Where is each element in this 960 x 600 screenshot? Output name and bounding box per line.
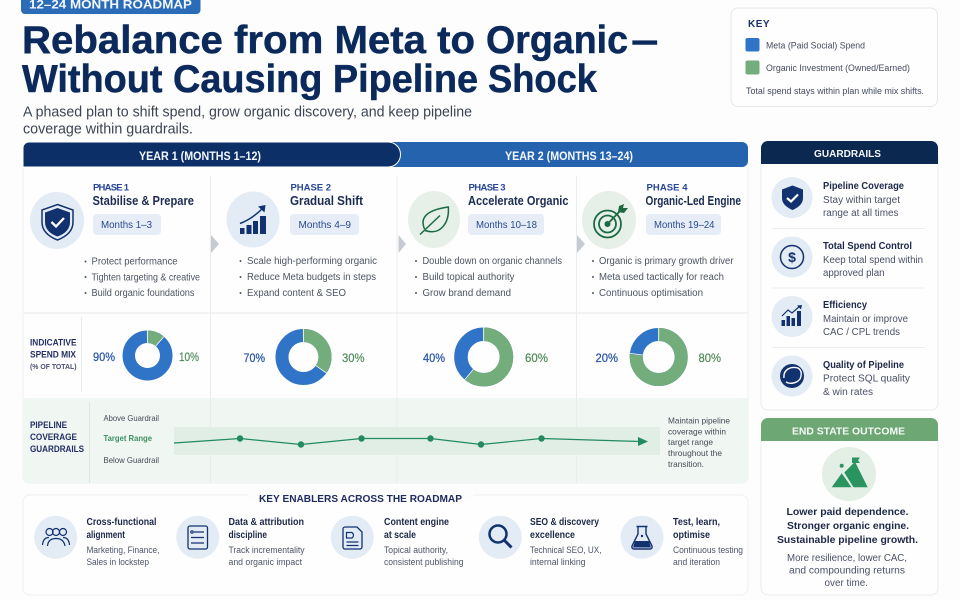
arrow: phase 3 to 4 xyxy=(577,235,585,253)
phase 4 xyxy=(582,182,741,299)
guardrail level labels xyxy=(104,413,159,465)
title: Organic xyxy=(486,19,628,62)
guardrail: pipeline coverage: Pipeline Coverage xyxy=(823,181,904,192)
enabler: seo: excellence xyxy=(530,530,575,541)
icon: leaf xyxy=(408,191,460,248)
pipeline note: Maintain pipeline xyxy=(668,416,730,426)
icon: shield xyxy=(30,192,84,249)
phase 3: Accelerate Organic xyxy=(468,194,569,208)
panel: key: Organic Investment (Owned/Earned) xyxy=(766,63,910,73)
phase 2 xyxy=(226,182,377,299)
key: organic swatch xyxy=(746,60,760,74)
arrow: phase 1 to 2 xyxy=(211,235,219,253)
phase 3 bullets xyxy=(415,256,562,299)
donut chart: phase 2 xyxy=(244,329,365,378)
enabler: test and learn: Continuous testing xyxy=(673,545,743,555)
spend mix label: SPEND MIX xyxy=(30,350,76,360)
guardrail: pipeline coverage: Stay within target xyxy=(823,195,900,206)
phase 2: Gradual Shift xyxy=(290,194,364,208)
enabler: seo xyxy=(479,516,602,567)
phase 2 bullets: Expand content & SEO xyxy=(247,288,346,299)
enabler: data and attribution: Data & attribution xyxy=(228,517,304,528)
spend mix label: INDICATIVE xyxy=(30,338,76,348)
enabler: data and attribution: Track incrementality xyxy=(228,545,305,555)
donut chart: phase 1: 10% xyxy=(179,350,199,364)
donut chart: phase 3: 60% xyxy=(525,351,548,365)
phase 4: Organic-Led Engine xyxy=(646,194,741,208)
key: meta swatch xyxy=(746,38,760,52)
donut chart: phase 4 xyxy=(596,328,721,380)
title: Without Causing Pipeline xyxy=(22,58,478,101)
guardrail: efficiency: CAC / CPL trends xyxy=(823,327,900,338)
panel: end state outcome: Sustainable pipeline growth. xyxy=(777,534,918,546)
enabler: content engine: Content engine xyxy=(384,517,449,528)
pipeline coverage label xyxy=(30,420,84,454)
phase 1 bullets: Tighten targeting & creative xyxy=(92,272,200,284)
guardrail: pipeline coverage: range at all times xyxy=(823,208,898,219)
enabler: seo: SEO & discovery xyxy=(530,517,599,528)
enabler: content engine: at scale xyxy=(384,530,416,541)
line chart: pipeline coverage xyxy=(174,427,660,455)
guardrail level labels: Target Range xyxy=(104,433,152,443)
enabler: data and attribution: discipline xyxy=(228,530,267,541)
phase 3 xyxy=(408,182,569,299)
enabler: test and learn: Test, learn, xyxy=(673,517,720,528)
guardrail: quality of pipeline: & win rates xyxy=(823,387,873,398)
title: Shock xyxy=(488,58,597,101)
phase 1 bullets: Build organic foundations xyxy=(92,288,194,299)
year 2 bar xyxy=(385,142,748,167)
donut chart: phase 1 xyxy=(93,330,199,374)
guardrail: total spend control: Total Spend Control xyxy=(823,241,912,252)
panel: end state outcome: and compounding returns xyxy=(789,566,905,576)
phase 2 bullets: Reduce Meta budgets in steps xyxy=(247,272,376,283)
donut chart: phase 3 xyxy=(423,328,548,380)
phase 3 bullets: Grow brand demand xyxy=(422,288,511,299)
panel: key: Meta (Paid Social) Spend xyxy=(766,40,865,50)
panel: end state outcome: END STATE OUTCOME xyxy=(792,426,905,438)
phase 1: PHASE 1 xyxy=(93,182,130,194)
pipeline note: target range xyxy=(668,437,713,447)
title: — xyxy=(632,19,657,62)
enabler: seo: Technical SEO, UX, xyxy=(530,545,602,555)
panel: end state outcome: over time. xyxy=(824,578,868,589)
guardrail: total spend control: Keep total spend within xyxy=(823,255,923,266)
donut chart: phase 1: 90% xyxy=(93,350,115,364)
panel: roadmap main xyxy=(23,160,748,483)
phase 4: PHASE 4 xyxy=(646,182,688,194)
phase 1 bullets: Protect performance xyxy=(92,257,178,268)
enabler: test and learn: and iteration xyxy=(673,557,720,567)
pipeline coverage label: PIPELINE xyxy=(30,420,67,430)
pipeline coverage label: COVERAGE xyxy=(30,432,77,442)
months pill: Months 19–24 xyxy=(654,220,715,231)
panel: guardrails xyxy=(761,141,938,410)
months pill xyxy=(468,214,544,235)
enabler: seo: internal linking xyxy=(530,557,586,567)
year 1 bar xyxy=(23,142,400,167)
guardrail: quality of pipeline: Quality of Pipeline xyxy=(823,360,904,371)
enabler: content engine xyxy=(331,516,464,567)
months pill: Months 1–3 xyxy=(101,220,152,231)
subtitle: coverage within guardrails. xyxy=(23,120,193,138)
pipeline note xyxy=(668,416,730,469)
panel: end state outcome xyxy=(761,418,938,595)
title: Rebalance from Meta to xyxy=(22,19,475,62)
panel: key: KEY xyxy=(748,19,770,30)
enabler: alignment: Cross-functional xyxy=(86,517,157,528)
enabler: alignment xyxy=(34,516,160,567)
phase 2 bullets: Scale high-performing organic xyxy=(247,256,377,267)
donut chart: phase 4: 80% xyxy=(698,351,721,365)
phase 4 bullets xyxy=(592,256,734,299)
icon: mountain with flag xyxy=(822,447,876,501)
donut chart: phase 4: 20% xyxy=(596,351,618,365)
roadmap badge xyxy=(21,0,200,14)
panel: key: Total spend stays within plan while mix shifts. xyxy=(746,86,924,96)
pipeline note: coverage within xyxy=(668,426,726,436)
guardrail: efficiency: Maintain or improve xyxy=(823,314,908,325)
enabler: data and attribution: and organic impact xyxy=(228,557,302,567)
months pill: Months 10–18 xyxy=(476,220,537,231)
phase 1 xyxy=(30,182,200,299)
subtitle: A phased plan to shift spend, grow organic discovery, and keep pipeline xyxy=(23,104,472,120)
phase 3 bullets: Build topical authority xyxy=(422,272,514,283)
pipeline note: throughout the xyxy=(668,448,722,458)
phase 1: Stabilise & Prepare xyxy=(92,194,194,208)
panel: key xyxy=(731,8,938,106)
year 1 bar: YEAR 1 (MONTHS 1–12) xyxy=(139,151,261,163)
icon: growth chart xyxy=(226,192,280,248)
phase 3: PHASE 3 xyxy=(468,182,506,194)
months pill: Months 4–9 xyxy=(298,220,351,231)
pipeline coverage label: GUARDRAILS xyxy=(30,444,84,454)
enabler: content engine: consistent publishing xyxy=(384,557,464,567)
arrow: phase 2 to 3 xyxy=(398,235,406,253)
panel: key enablers xyxy=(23,490,748,595)
guardrail: pipeline coverage xyxy=(772,177,904,219)
guardrail level labels: Below Guardrail xyxy=(104,455,159,465)
phase 1 bullets xyxy=(84,257,200,299)
panel: guardrails: GUARDRAILS xyxy=(814,148,881,160)
donut chart: phase 3: 40% xyxy=(423,351,445,365)
panel: key enablers: KEY ENABLERS ACROSS THE ROADMAP xyxy=(259,493,462,505)
phase 4 bullets: Meta used tactically for reach xyxy=(599,272,724,283)
months pill xyxy=(93,214,161,235)
enabler: alignment: alignment xyxy=(86,530,126,541)
enabler: alignment: Marketing, Finance, xyxy=(86,545,160,555)
guardrail: total spend control xyxy=(772,236,923,279)
months pill xyxy=(646,214,721,235)
enabler: alignment: Sales in lockstep xyxy=(86,557,149,567)
guardrail: quality of pipeline xyxy=(772,356,910,398)
guardrail level labels: Above Guardrail xyxy=(104,413,159,423)
phase 2 bullets xyxy=(240,256,377,299)
guardrail: total spend control: approved plan xyxy=(823,268,884,279)
enabler: test and learn xyxy=(620,516,743,567)
pipeline row background xyxy=(23,398,748,483)
months pill xyxy=(290,214,359,235)
year 2 bar: YEAR 2 (MONTHS 13–24) xyxy=(505,151,633,163)
panel: end state outcome: Stronger organic engine. xyxy=(787,520,909,532)
guardrail: efficiency: Efficiency xyxy=(823,300,867,311)
guardrail: efficiency xyxy=(772,296,908,338)
title xyxy=(22,19,657,101)
guardrail: quality of pipeline: Protect SQL quality xyxy=(823,374,910,384)
panel: end state outcome: Lower paid dependence. xyxy=(786,506,909,518)
donut chart: phase 2: 30% xyxy=(342,351,365,365)
phase 4 bullets: Organic is primary growth driver xyxy=(599,256,734,267)
subtitle xyxy=(23,104,472,138)
enabler: data and attribution xyxy=(176,516,305,567)
pipeline note: transition. xyxy=(668,459,704,469)
spend mix label xyxy=(30,338,77,371)
enabler: content engine: Topical authority, xyxy=(384,545,448,555)
spend mix label: (% OF TOTAL) xyxy=(30,362,77,371)
icon: target xyxy=(582,191,636,249)
enabler: test and learn: optimise xyxy=(673,530,710,541)
phase 3 bullets: Double down on organic channels xyxy=(422,256,562,267)
phase 4 bullets: Continuous optimisation xyxy=(599,288,703,299)
panel: end state outcome: More resilience, lower CAC, xyxy=(787,553,907,564)
guardrail: total spend control: $ xyxy=(788,249,796,265)
donut chart: phase 2: 70% xyxy=(244,351,265,365)
phase 2: PHASE 2 xyxy=(290,182,331,194)
